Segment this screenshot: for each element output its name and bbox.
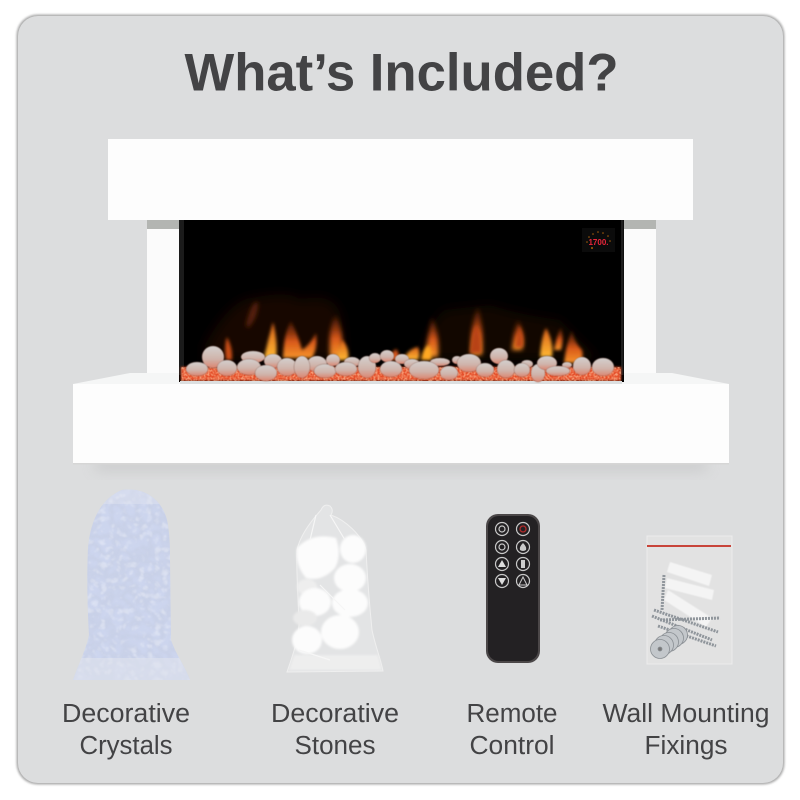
pebbles <box>186 346 614 382</box>
label: remote control: Remote <box>466 700 558 728</box>
right pillar <box>623 220 656 383</box>
label: decorative crystals <box>62 700 190 760</box>
digital display <box>582 228 615 252</box>
title: What’s Included? <box>184 44 618 102</box>
label: wall mounting fixings: Wall Mounting <box>602 700 770 728</box>
icon: bag of wall fixings <box>647 536 732 664</box>
icon: remote control <box>486 514 540 663</box>
digital display: 1700. <box>588 238 609 247</box>
base plinth <box>73 373 729 464</box>
icon: bag of decorative crystals <box>70 488 192 682</box>
top mantel shelf <box>108 139 693 220</box>
label: remote control: Control <box>470 732 554 760</box>
label: decorative stones <box>271 700 399 760</box>
left pillar <box>147 220 180 383</box>
flames <box>205 294 600 363</box>
label: decorative stones: Stones <box>294 732 376 760</box>
firebox <box>179 220 624 384</box>
label: decorative crystals: Crystals <box>80 732 172 760</box>
label: wall mounting fixings <box>602 700 770 760</box>
label: wall mounting fixings: Fixings <box>644 732 728 760</box>
glass front lip <box>180 381 622 384</box>
ember bed <box>181 367 621 381</box>
label: remote control <box>466 700 558 760</box>
label: decorative stones: Decorative <box>271 700 399 728</box>
icon: bag of decorative stones <box>287 505 383 672</box>
fireplace shadow on wall <box>95 460 707 470</box>
label: decorative crystals: Decorative <box>62 700 190 728</box>
fireplace <box>73 139 729 470</box>
